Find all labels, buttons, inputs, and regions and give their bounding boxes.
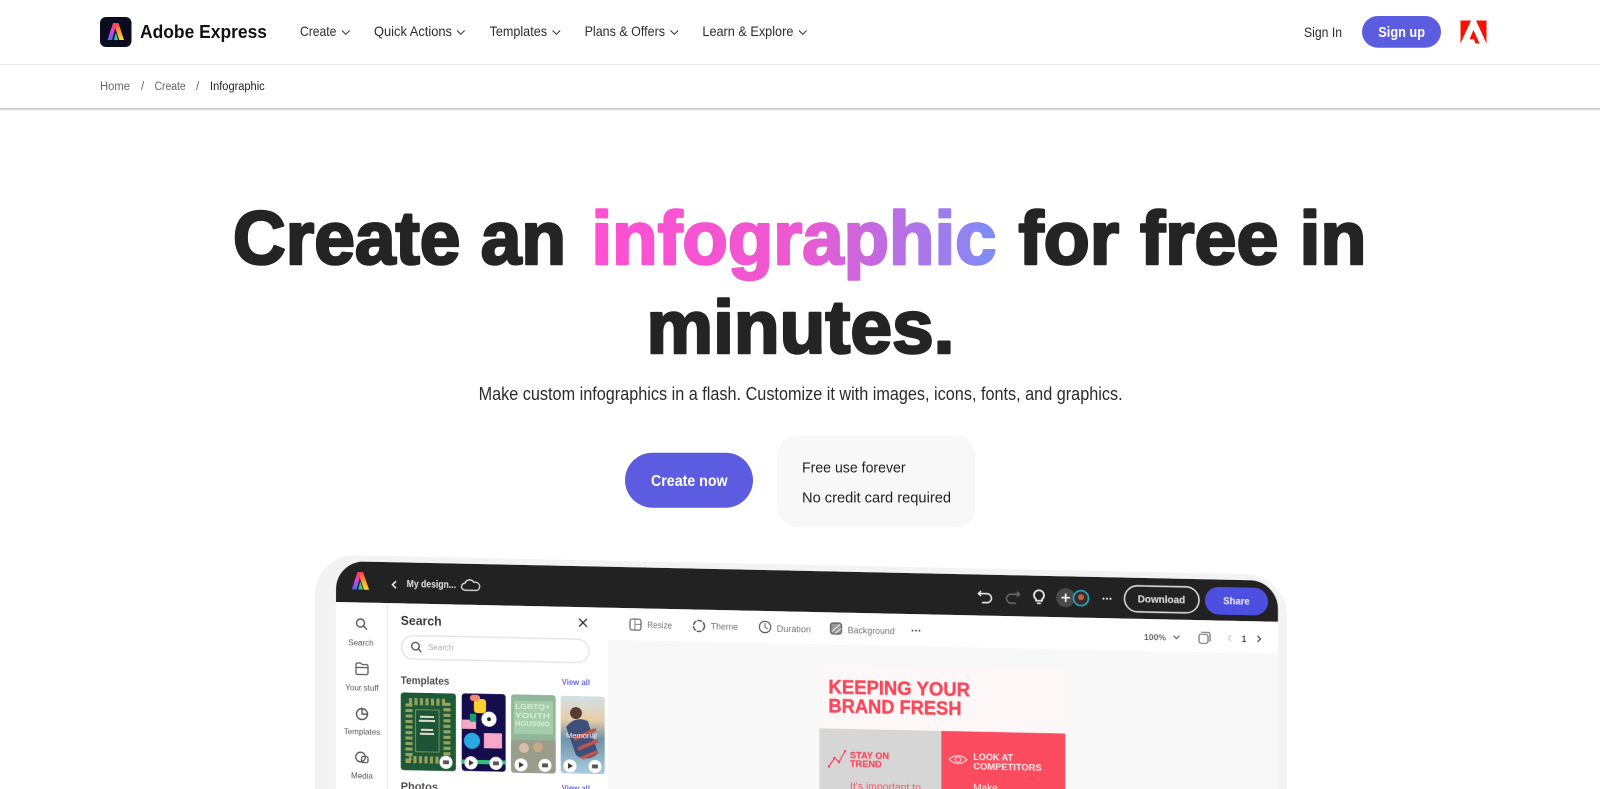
search input: Search [428, 643, 453, 652]
panel: look at competitors [941, 731, 1065, 789]
card title: BRAND FRESH [828, 695, 961, 720]
left icon rail: Templates [344, 727, 380, 737]
zoom level: 100% [1144, 632, 1166, 642]
panel: look at competitors: LOOK AT [973, 752, 1013, 763]
top navigation bar [100, 16, 1486, 48]
panel: free use notes: No credit card required [802, 489, 951, 506]
breadcrumb: Infographic [210, 81, 265, 93]
card title: KEEPING YOUR [828, 676, 970, 701]
headline: for free in [1018, 196, 1366, 280]
nav menu items: Quick Actions [374, 23, 452, 39]
icon: search [356, 619, 367, 630]
icon: pages [1199, 632, 1210, 643]
duration tool [759, 621, 811, 635]
view all link: View all [562, 678, 590, 687]
left icon rail: Search [348, 638, 374, 648]
icon: cloud [462, 580, 480, 591]
sign in link: Sign In [1304, 24, 1342, 40]
icon: eye [949, 755, 967, 764]
nav menu items [300, 23, 807, 39]
background tool: Background [848, 625, 895, 637]
search input [402, 635, 589, 663]
download button [1124, 586, 1199, 613]
template thumb: LGBTQ+ youth housing: LGBTQ+ [515, 702, 551, 712]
brand name: Adobe Express [140, 21, 267, 42]
canvas toolbar [630, 618, 1260, 645]
panel: stay on trend [819, 728, 941, 789]
share button: Share [1223, 596, 1250, 608]
headline [233, 196, 1366, 369]
background tool [830, 623, 895, 637]
panel: search sidebar [401, 613, 605, 789]
icon: app logo [352, 572, 369, 590]
create now button: Create now [651, 473, 728, 490]
breadcrumb [100, 81, 265, 93]
icon: redo [1006, 592, 1020, 603]
breadcrumb: Home [100, 81, 130, 93]
panel: stay on trend: TREND [850, 759, 882, 769]
template thumb: holiday card [401, 692, 456, 771]
panel: stay on trend: STAY ON [850, 750, 889, 761]
breadcrumb: Create [155, 81, 186, 93]
create now button [625, 453, 753, 508]
top dark bar [336, 561, 1278, 622]
template thumb: LGBTQ+ youth housing: HOUSING [515, 719, 550, 728]
resize tool [630, 619, 672, 632]
theme tool: Theme [711, 621, 738, 633]
page navigator: 1 [1241, 634, 1247, 644]
nav menu items: Plans & Offers [585, 23, 665, 39]
panel: look at competitors: COMPETITORS [973, 761, 1042, 773]
headline: Create an [233, 196, 566, 280]
template thumb: LGBTQ+ youth housing: YOUTH [515, 711, 550, 720]
nav menu items: Templates [490, 23, 547, 39]
editor mockup [315, 555, 1287, 789]
template thumb: memorial: Memorial [566, 733, 597, 740]
sign up button: Sign up [1378, 25, 1425, 41]
add collaborator button [1056, 588, 1075, 607]
subheading: Make custom infographics in a flash. Customize it with images, icons, fonts, and graphics. [479, 384, 1123, 404]
headline: infographic [592, 196, 996, 280]
icon: Adobe Express logo [100, 17, 132, 47]
nav menu items: Learn & Explore [702, 23, 794, 39]
avatar [1074, 590, 1088, 606]
infographic card [819, 665, 1065, 789]
icon: trend line [828, 750, 846, 768]
icon: lightbulb [1034, 590, 1044, 603]
panel: free use notes: Free use forever [802, 459, 906, 476]
card title [828, 676, 970, 720]
icon: templates [356, 708, 368, 720]
more dots [1102, 598, 1112, 600]
panel: free use notes [777, 435, 975, 527]
share button [1205, 587, 1268, 616]
breadcrumb: / [196, 81, 200, 93]
template thumb: LGBTQ+ youth housing [511, 694, 556, 774]
breadcrumb: / [141, 81, 145, 93]
more tools [912, 630, 920, 632]
icon: close [579, 619, 587, 627]
template thumb: memorial [561, 696, 605, 774]
icon: folder [356, 663, 368, 675]
sidebar title: Search [401, 613, 442, 629]
zoom level [1144, 632, 1180, 643]
theme tool [694, 620, 738, 633]
page navigator [1228, 634, 1260, 644]
resize tool: Resize [647, 620, 672, 632]
template thumb: colourful letters [462, 693, 506, 772]
sign up button [1362, 16, 1441, 48]
left icon rail: Media [351, 771, 373, 781]
canvas area [608, 640, 1278, 789]
icon: undo [978, 591, 992, 603]
back chevron [392, 581, 396, 588]
left icon rail: Your stuff [345, 683, 379, 693]
templates heading: Templates [401, 675, 449, 688]
document name: My design... [407, 579, 456, 591]
headline: minutes. [646, 285, 954, 369]
left icon rail [344, 619, 380, 781]
download button: Download [1138, 594, 1185, 606]
duration tool: Duration [777, 624, 811, 635]
nav menu items: Create [300, 23, 337, 39]
icon: media [356, 752, 368, 763]
icon: Adobe logo [1460, 20, 1486, 44]
